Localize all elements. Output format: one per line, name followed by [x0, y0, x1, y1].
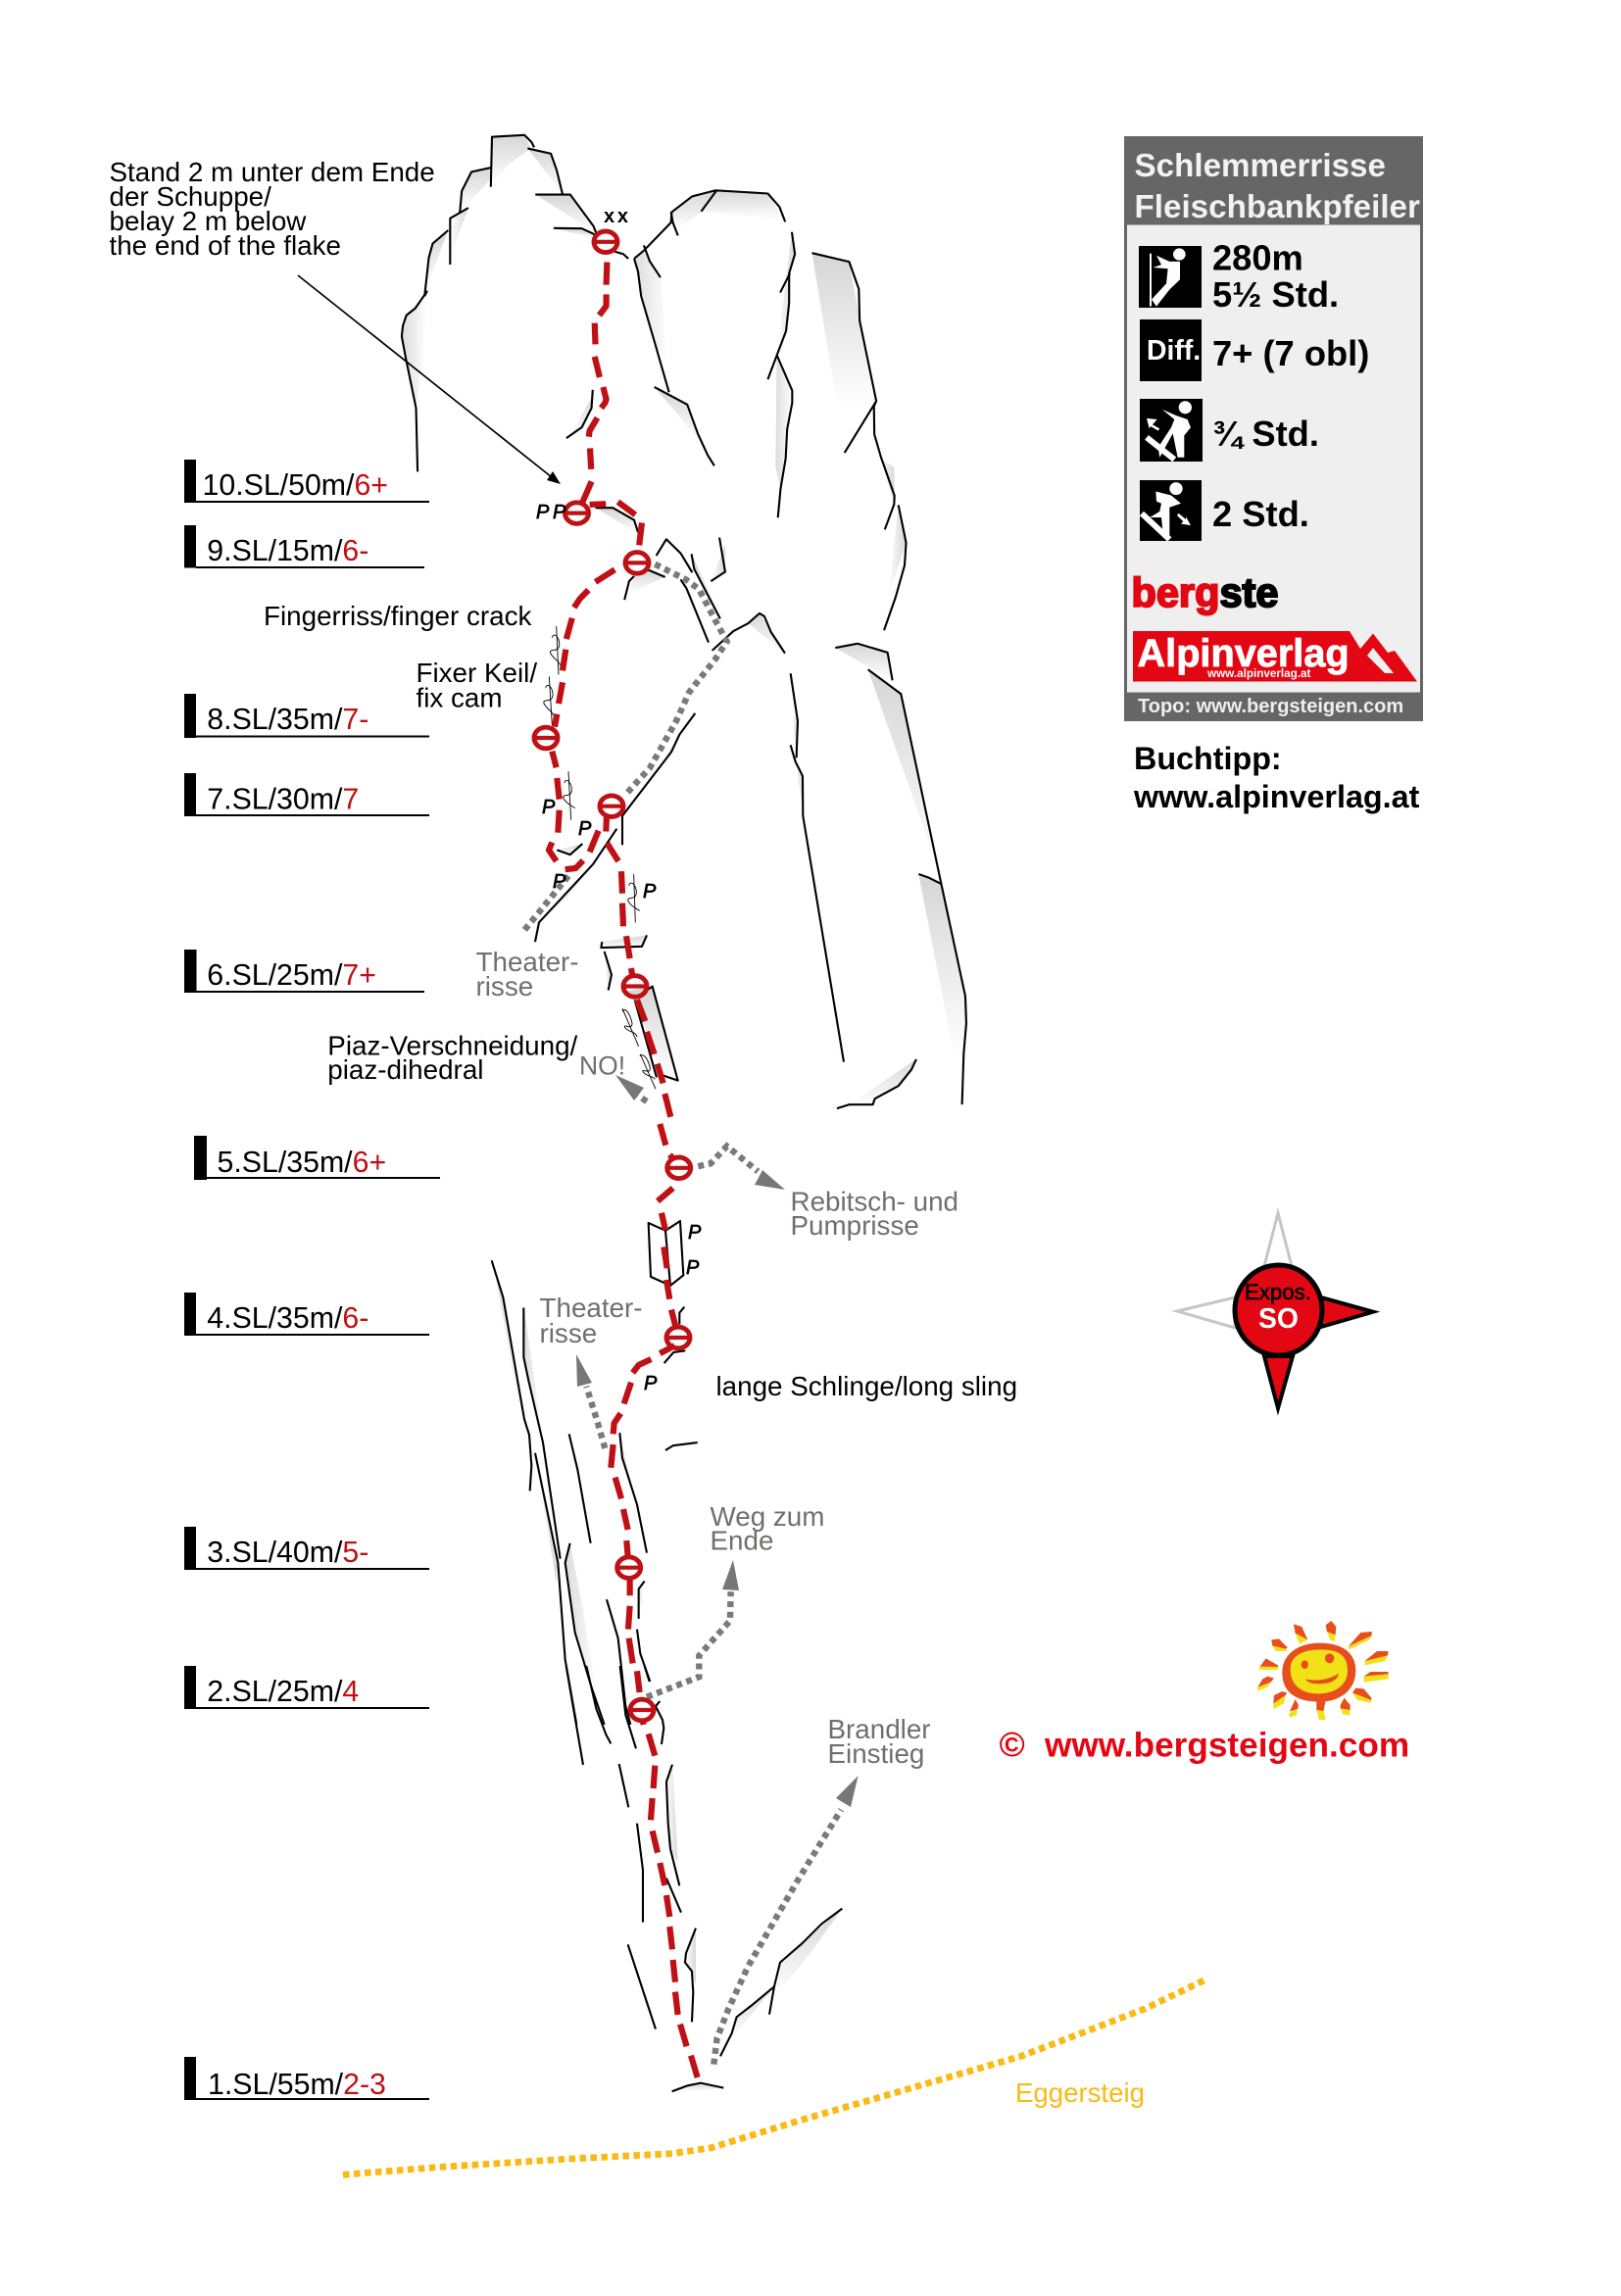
pitch 8 label: 8.SL/35m/7-	[207, 704, 368, 736]
piton marks: P	[686, 1257, 700, 1279]
dotted yellow Eggersteig path	[343, 1980, 1203, 2174]
stats text: 5½ Std.	[1212, 274, 1339, 315]
variant label: Brandler Einstieg: Einstieg	[827, 1738, 924, 1769]
belay stations	[534, 231, 691, 1721]
logo: bergsteigen cropped: bergste	[1131, 569, 1278, 615]
pitch 4 label: 4.SL/35m/6-	[207, 1302, 368, 1335]
piton marks: P	[578, 818, 592, 840]
compass: exposure SO: Expos.	[1245, 1280, 1311, 1304]
icon: descent runner	[1140, 480, 1202, 541]
arrowheads: variant routes	[576, 1170, 785, 1590]
annotation: belay below flake: Stand 2 m unter dem Ende	[110, 157, 435, 187]
pitch 7 label: 7.SL/30m/7	[207, 784, 359, 816]
logo: Alpinverlag	[1133, 631, 1417, 682]
book tip: www.alpinverlag.at	[1133, 779, 1420, 814]
piton marks: P	[553, 871, 566, 893]
fixed cam symbols	[544, 626, 656, 1089]
pitch 6 label: 6.SL/25m/7+	[207, 959, 376, 992]
pitch 3 label: 3.SL/40m/5-	[207, 1537, 368, 1569]
variant label: Theaterrisse lower: Theater-	[539, 1293, 643, 1323]
variant label: Theaterrisse upper: risse	[476, 971, 533, 1001]
arrow: belay annotation pointer	[298, 275, 561, 484]
pitch 5 label	[194, 1136, 440, 1180]
main red route upper	[566, 262, 642, 639]
variant label: Theaterrisse lower	[539, 1293, 643, 1348]
variant label: Weg zum Ende	[710, 1501, 824, 1556]
note: fixed cam	[416, 658, 537, 713]
rock outline lines middle wall	[535, 613, 966, 1108]
stats text: 280m	[1212, 237, 1303, 278]
pitch 4 label	[184, 1293, 429, 1336]
info panel	[1124, 136, 1423, 721]
pitch 1 label: 1.SL/55m/2-3	[208, 2069, 386, 2101]
book tip: Buchtipp:	[1134, 741, 1282, 776]
annotation: belay below flake: belay 2 m below	[110, 206, 307, 236]
rock shading lower wall	[495, 1272, 643, 1698]
icon: climber	[1139, 246, 1202, 308]
stats text: 7+ (7 obl)	[1212, 333, 1369, 373]
variant label: Rebitsch und Pumprisse: Pumprisse	[790, 1210, 919, 1241]
pitch 6 label	[184, 950, 424, 993]
pitch 10 label	[184, 460, 429, 503]
note: fixed cam: fix cam	[416, 683, 503, 713]
compass: exposure SO: SO	[1258, 1303, 1299, 1335]
rock shading upper wall	[402, 135, 907, 618]
piton marks: P	[644, 1373, 658, 1394]
icon: approach hiker	[1140, 399, 1203, 462]
variant label: Weg zum Ende: Ende	[710, 1525, 773, 1556]
main red route lower	[611, 1154, 675, 1692]
pitch 1 label	[184, 2057, 429, 2101]
logo: Alpinverlag: www.alpinverlag.at	[1206, 667, 1311, 680]
rock shading middle wall	[539, 613, 965, 1104]
piton marks: P	[643, 881, 657, 903]
icon: difficulty	[1140, 319, 1202, 381]
variant label: Brandler Einstieg: Brandler	[827, 1714, 931, 1744]
annotation: belay below flake: the end of the flake	[110, 230, 341, 261]
note: piaz dihedral: Piaz-Verschneidung/	[327, 1031, 578, 1061]
variant label: Theaterrisse upper: Theater-	[476, 947, 579, 977]
variant label: Rebitsch und Pumprisse: Rebitsch- und	[790, 1187, 958, 1217]
variant label: Theaterrisse upper	[476, 947, 579, 1001]
stats text	[1212, 237, 1369, 534]
rock outline lines upper wall	[402, 135, 907, 643]
pitch 5 label: 5.SL/35m/6+	[218, 1147, 386, 1179]
pitch 9 label: 9.SL/15m/6-	[207, 535, 368, 567]
pitch 7 label	[184, 773, 429, 816]
dotted grey variants upper	[524, 564, 727, 1101]
copyright website: ©	[1000, 1725, 1025, 1764]
pitch 2 label: 2.SL/25m/4	[207, 1676, 359, 1708]
pitch 3 label	[184, 1527, 429, 1570]
rock outline lines lower wall	[492, 1221, 698, 1725]
compass: exposure SO	[1177, 1213, 1373, 1408]
note: fixed cam: Fixer Keil/	[416, 658, 537, 688]
piton marks: P	[542, 797, 556, 818]
dotted grey Brandler approach	[713, 1810, 841, 2065]
book tip	[1133, 741, 1420, 814]
rock outline lines base	[566, 1666, 842, 2091]
pitch 10 label: 10.SL/50m/6+	[202, 469, 388, 502]
variant label: Weg zum Ende: Weg zum	[710, 1501, 824, 1532]
piton marks	[536, 502, 702, 1394]
label: Eggersteig: Eggersteig	[1015, 2077, 1145, 2108]
panel title	[1135, 148, 1420, 225]
panel background	[1124, 136, 1423, 721]
logo: Alpinverlag: Alpinverlag	[1137, 632, 1350, 675]
annotation: belay below flake: der Schuppe/	[110, 181, 271, 212]
piton marks: P	[536, 502, 550, 523]
main red route middle	[549, 650, 670, 1146]
pitch 9 label	[184, 525, 424, 568]
pitch 8 label	[184, 694, 429, 738]
annotation: belay below flake	[110, 157, 435, 261]
variant label: NO: NO!	[579, 1050, 625, 1080]
note: finger crack: Fingerriss/finger crack	[264, 601, 532, 631]
topo credit: Topo: www.bergsteigen.com	[1138, 696, 1403, 717]
piton marks: P	[688, 1222, 702, 1244]
variant label: Rebitsch und Pumprisse	[790, 1187, 958, 1241]
note: piaz dihedral: piaz-dihedral	[327, 1054, 483, 1085]
variant label: Theaterrisse lower: risse	[539, 1318, 597, 1348]
copyright website: www.bergsteigen.com	[1044, 1727, 1409, 1765]
anchor mark xx: xx	[604, 206, 628, 227]
note: piaz dihedral	[327, 1031, 578, 1085]
icon: smiling sun	[1257, 1621, 1389, 1720]
panel title: Schlemmerrisse	[1135, 148, 1386, 184]
pitch 2 label	[184, 1666, 429, 1709]
panel title: Fleischbankpfeiler	[1135, 189, 1420, 225]
rock shading base	[666, 1765, 842, 2091]
arrowhead: NO	[615, 1075, 644, 1100]
main red route base	[643, 1722, 698, 2077]
piton marks: P	[553, 502, 566, 523]
variant label: Brandler Einstieg	[827, 1714, 931, 1769]
note: long sling: lange Schlinge/long sling	[715, 1371, 1017, 1401]
stats text: 2 Std.	[1212, 494, 1309, 534]
icon: difficulty: Diff.	[1147, 335, 1201, 366]
dotted grey variants lower	[586, 1147, 758, 1697]
stats text: ¾ Std.	[1212, 414, 1319, 454]
arrowhead: Brandler Einstieg	[836, 1776, 859, 1807]
